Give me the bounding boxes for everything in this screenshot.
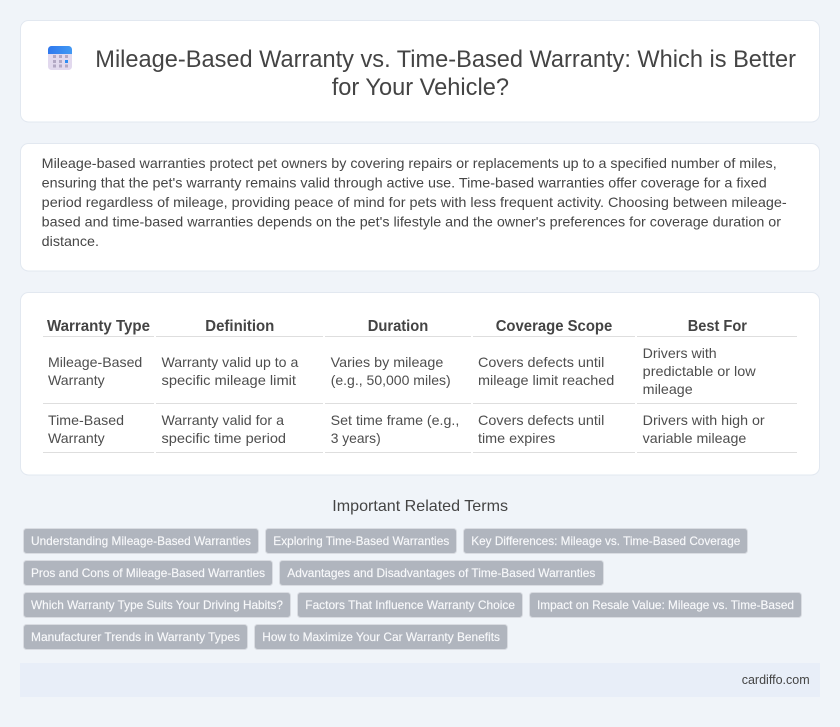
table row: time-based warranty: Drivers with high or [643,412,765,428]
panel: summary text: Mileage-based warranties protect pet owners by covering repairs or replacements up to a specified number of miles, [42,155,777,171]
tag [24,624,248,650]
table row: mileage-based warranty [48,345,757,397]
tag: Manufacturer Trends in Warranty Types [31,630,240,644]
table row: time-based warranty: 3 years) [331,430,381,446]
tag [24,528,258,554]
title [95,46,796,101]
table row: mileage-based warranty: Warranty valid up to a [162,354,299,370]
table row: mileage-based warranty: specific mileage limit [162,372,296,388]
tag: Impact on Resale Value: Mileage vs. Time-Based [537,598,794,612]
footer bar [20,663,820,697]
table row: mileage-based warranty: Warranty [48,372,105,388]
table row: time-based warranty: Covers defects until [478,412,604,428]
table header row [47,318,747,335]
tag [24,592,290,618]
table row: time-based warranty [48,412,765,446]
footer bar: cardiffo.com [742,672,810,687]
tag: Understanding Mileage-Based Warranties [31,534,251,548]
tag [280,560,604,586]
tag [254,624,508,650]
panel: summary text [20,144,820,271]
tag: Pros and Cons of Mileage-Based Warranties [31,566,265,580]
table row: time-based warranty: time expires [478,430,555,446]
title: Mileage-Based Warranty vs. Time-Based Warranty: Which is Better [95,46,796,73]
tag: How to Maximize Your Car Warranty Benefits [262,630,500,644]
title: for Your Vehicle? [332,74,509,101]
table row: mileage-based warranty: predictable or low [643,363,757,379]
tag [298,592,522,618]
tag: Factors That Influence Warranty Choice [305,598,515,612]
tag [24,560,272,586]
table row: time-based warranty: variable mileage [643,430,747,446]
table header row: Coverage Scope [496,318,612,335]
tag [266,528,456,554]
panel: comparison table [20,292,820,475]
table row: mileage-based warranty: mileage limit reached [478,372,614,388]
related terms tags [24,528,802,650]
table row: time-based warranty: Warranty [48,430,105,446]
table row: time-based warranty: Set time frame (e.g., [331,412,459,428]
heading: important related terms: Important Related Terms [332,498,508,515]
table row: mileage-based warranty: (e.g., 50,000 miles) [331,372,451,388]
table row: mileage-based warranty: Drivers with [643,345,717,361]
panel: summary text: based and time-based warranties depends on the pet's lifestyle and the owner's preferences for coverage duration or [42,214,781,230]
tag: Advantages and Disadvantages of Time-Based Warranties [287,566,595,580]
table row: time-based warranty: Warranty valid for a [162,412,284,428]
table row: time-based warranty: specific time period [162,430,286,446]
table header row: Warranty Type [47,318,150,335]
panel: summary text: period regardless of mileage, providing peace of mind for pets with less frequent activity. Choosing between mileage- [42,194,787,210]
tag: Key Differences: Mileage vs. Time-Based Coverage [471,534,741,548]
table row: mileage-based warranty: Covers defects until [478,354,604,370]
tag [464,528,748,554]
tag: Exploring Time-Based Warranties [273,534,449,548]
tag [530,592,802,618]
table row: time-based warranty: Time-Based [48,412,124,428]
table row: mileage-based warranty: Mileage-Based [48,354,142,370]
icon: calendar [48,46,72,70]
table row: mileage-based warranty: mileage [643,381,693,397]
panel: summary text: distance. [42,233,99,249]
table header row: Definition [205,318,274,335]
table header row: Duration [368,318,428,335]
table row: mileage-based warranty: Varies by mileage [331,354,444,370]
panel: summary text: ensuring that the pet's warranty remains valid through active use. Time-based warranties offer coverage for a fixed [42,174,767,190]
tag: Which Warranty Type Suits Your Driving Habits? [31,598,283,612]
panel: title card [20,20,820,122]
table header row: Best For [688,318,747,335]
